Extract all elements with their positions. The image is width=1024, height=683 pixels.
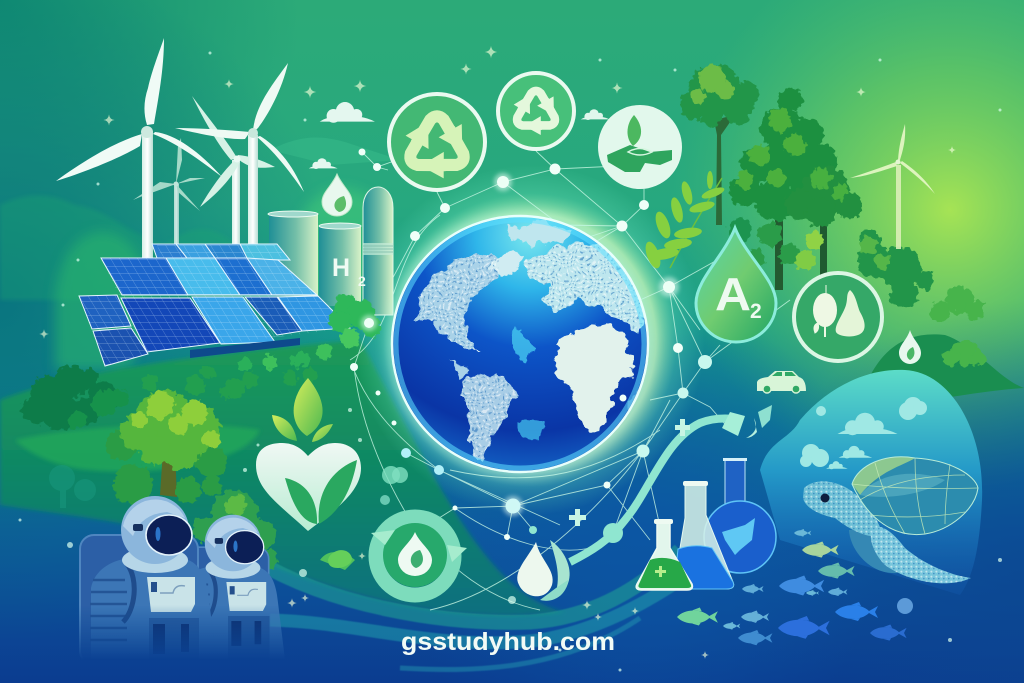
mid flask [674, 481, 734, 589]
panel stand [190, 338, 300, 358]
curved growth arrow [570, 405, 772, 562]
small pale shapes [320, 466, 408, 570]
faded silhouette trees [49, 465, 96, 508]
half drop icon [517, 540, 570, 601]
globe [387, 211, 653, 477]
round flask [704, 458, 776, 573]
wind turbine small back [133, 138, 205, 246]
hydrogen tanks [268, 187, 393, 315]
H2 label [332, 254, 366, 289]
icon: drop above tanks [322, 174, 352, 216]
glow behind globe [355, 165, 705, 515]
front panels [101, 258, 350, 352]
distant hills left [0, 137, 400, 370]
tall tree [729, 88, 837, 290]
recycle drop icon [371, 517, 467, 595]
wind turbine left tall [56, 38, 222, 262]
network nodes [350, 148, 712, 540]
fish school [677, 529, 913, 645]
right tree [785, 166, 862, 280]
small flask [636, 519, 692, 590]
icon: car [757, 371, 806, 393]
icon: recycle circle small [498, 73, 574, 149]
big tree [106, 390, 228, 505]
H2 label: 2 [358, 273, 366, 289]
astronaut left [79, 496, 211, 653]
tree top [680, 64, 759, 225]
icon: leaf on block circle [598, 105, 682, 189]
astronaut right [198, 514, 284, 650]
back row panels [152, 244, 290, 260]
ocean dome [760, 370, 982, 595]
icon: fruit circle [794, 273, 882, 361]
front flipper [871, 527, 971, 583]
icon: hydrogen drop [696, 228, 776, 342]
right hill [860, 334, 1024, 403]
heart icon with sprout [256, 378, 361, 531]
clouds in dome [800, 397, 927, 469]
flowing bands [255, 550, 680, 670]
far right wind turbine [850, 124, 935, 249]
recycle arrows [399, 116, 473, 183]
bush beside tanks [238, 294, 381, 372]
wind turbine middle [192, 96, 275, 246]
lawn patch [15, 425, 260, 472]
icon: recycle circle large [389, 94, 485, 190]
shell [852, 457, 978, 535]
flasks [636, 458, 776, 590]
icon: small drop right [899, 330, 921, 364]
right trees [680, 64, 986, 366]
left landscape [0, 340, 565, 616]
clouds left [309, 102, 375, 169]
wind turbine right tall [175, 63, 304, 245]
fern leaves [643, 171, 726, 270]
heart leaves [285, 460, 357, 524]
website text: gsstudyhub.com [401, 628, 615, 656]
astronauts [80, 496, 284, 670]
network lines [350, 151, 790, 610]
continents [416, 222, 650, 462]
lower bushes [728, 218, 986, 366]
icon: hydrogen drop: A [715, 268, 751, 320]
plus signs [569, 419, 690, 526]
sprout [272, 378, 333, 442]
glow on nodes [361, 173, 679, 516]
heart [256, 443, 361, 531]
icon: hydrogen drop: 2 [750, 300, 762, 323]
bush behind astronauts [192, 491, 278, 570]
small cloud between icons [581, 109, 610, 120]
left tree line [21, 365, 317, 430]
back flipper [849, 528, 899, 573]
turtle [803, 457, 978, 583]
lower left panels [79, 295, 148, 366]
H2 label: H [332, 254, 350, 282]
neck and head [803, 481, 882, 536]
solar panels [79, 244, 350, 366]
